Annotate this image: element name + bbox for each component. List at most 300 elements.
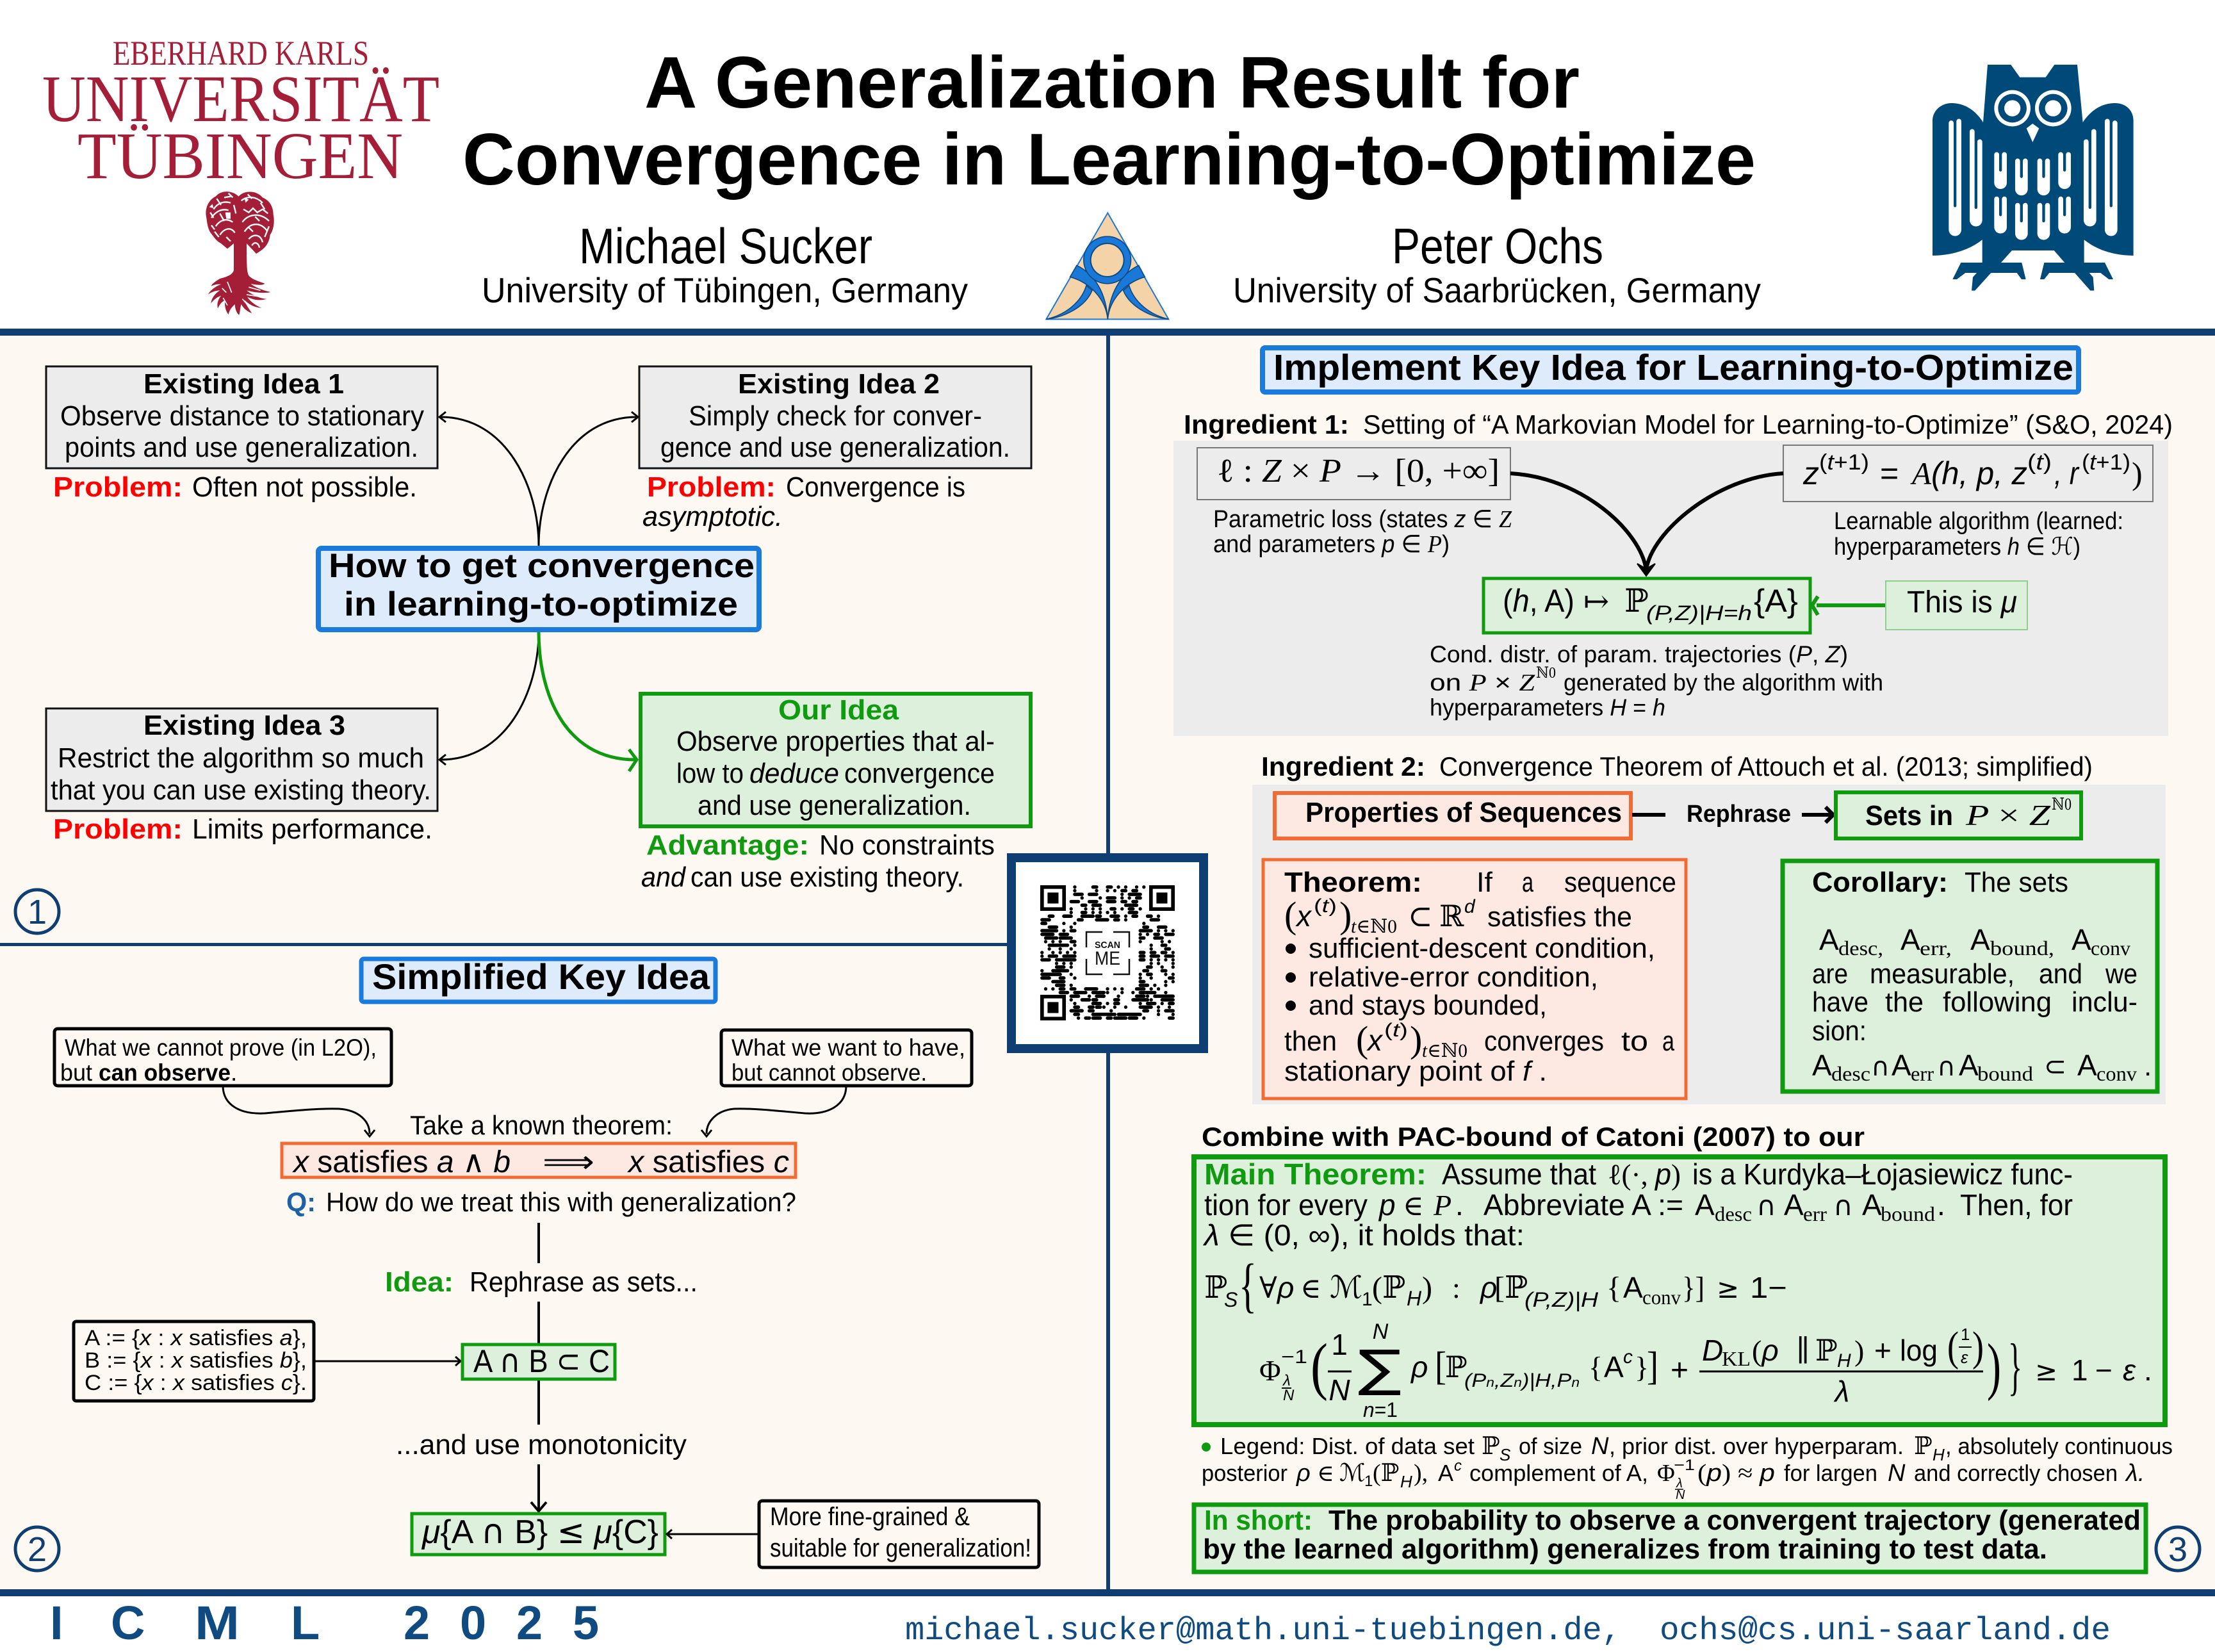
theorem box: ) xyxy=(1339,894,1352,936)
formula: second line: { xyxy=(1589,1351,1603,1384)
theorem box: relative-error condition, xyxy=(1309,961,1598,993)
theorem box: converges xyxy=(1484,1026,1604,1057)
title: A Generalization Result for xyxy=(644,42,1580,124)
conditional distribution box: {A} xyxy=(1754,583,1798,619)
legend: N xyxy=(1888,1460,1906,1487)
arrow: this is mu xyxy=(1812,596,1886,615)
arrowhead xyxy=(1637,564,1655,576)
in short box xyxy=(1194,1505,2146,1572)
conference name: 2 xyxy=(404,1596,430,1649)
card: existing idea 2: gence and use generalization. xyxy=(660,432,1010,463)
formula: second line: ) xyxy=(1987,1330,2001,1402)
sets box xyxy=(1836,792,2081,838)
theorem box: to xyxy=(1621,1026,1648,1057)
theorem statement: ∩ xyxy=(1756,1190,1776,1222)
corollary box: err xyxy=(1911,1062,1934,1085)
card: our idea: Advantage: xyxy=(646,830,809,861)
corollary box: bound xyxy=(1977,1062,2033,1085)
logo wordmark: EBERHARD KARLS xyxy=(113,34,369,72)
algorithm box: (t+1) xyxy=(1819,450,1869,475)
caption: conditional distribution: Cond. distr. of param. trajectories (P, Z) xyxy=(1430,641,1848,667)
ingredient 1 heading: Setting of “A Markovian Model for Learning-to-Optimize” (S&O, 2024) xyxy=(1363,409,2173,439)
algorithm box: A(h, p, z xyxy=(1910,455,2027,491)
theorem box: d xyxy=(1464,896,1476,917)
theorem box: sufficient-descent condition, xyxy=(1309,933,1655,964)
panel: how to get convergence xyxy=(15,366,1031,933)
conference name xyxy=(50,1596,599,1649)
corollary box: bound, xyxy=(1990,936,2054,960)
card: existing idea 1: Often not possible. xyxy=(192,471,417,503)
formula: second line: ( xyxy=(1947,1323,1959,1370)
theorem box: x satisfies a ∧ b xyxy=(292,1145,511,1179)
this is mu box xyxy=(1886,581,2027,630)
theorem box: then xyxy=(1284,1026,1337,1057)
scan me mark: ME xyxy=(1095,948,1120,969)
theorem box: ⟹ xyxy=(543,1145,594,1179)
logo wordmark: TÜBINGEN xyxy=(78,119,403,193)
corollary box: inclu- xyxy=(2072,986,2137,1018)
formula: second line: } xyxy=(2008,1330,2022,1402)
formula: second line: ε xyxy=(1961,1348,1968,1367)
caption: parametric loss: Parametric loss (states z ∈ Z xyxy=(1213,506,1512,533)
loss function box: ℓ : Z × P → [0, +∞] xyxy=(1217,453,1500,489)
badge: section 3 xyxy=(2156,1527,2200,1571)
author: Peter Ochs: Peter Ochs xyxy=(1392,218,1603,274)
conditional distribution box: ℙ xyxy=(1624,583,1649,619)
callout: cannot prove: but xyxy=(60,1059,93,1086)
formula: second line: ( xyxy=(1311,1330,1328,1402)
sets box: Sets in xyxy=(1865,800,1953,831)
theorem box: ( xyxy=(1356,1018,1368,1060)
set definitions box xyxy=(74,1321,314,1401)
legend: (p) ≈ p xyxy=(1697,1460,1775,1487)
theorem box: ⊂ xyxy=(1408,900,1433,933)
card: our idea: Observe properties that al- xyxy=(676,726,995,757)
formula: second line: ] xyxy=(1647,1345,1658,1388)
legend: posterior xyxy=(1202,1460,1287,1486)
formula: second line: D xyxy=(1702,1334,1723,1367)
callout: cannot prove xyxy=(54,1029,391,1086)
formula: first line: ρ xyxy=(1276,1271,1294,1304)
panel: ingredient 2 xyxy=(1252,785,2166,1104)
corollary box: ∩ xyxy=(1871,1052,1890,1082)
callout: more fine-grained: More fine-grained & xyxy=(770,1503,970,1531)
callout: want to have xyxy=(721,1030,972,1086)
icon: tree xyxy=(206,192,274,315)
theorem box: ℝ xyxy=(1439,900,1464,933)
panel: ingredient 1 xyxy=(1173,441,2168,736)
theorem statement: tion for every xyxy=(1204,1188,1368,1222)
heading: Simplified Key Idea xyxy=(372,956,710,997)
formula: second line: + xyxy=(1874,1334,1892,1367)
rephrase arrow xyxy=(1632,801,1833,828)
legend: ℙ xyxy=(1914,1433,1933,1460)
callout: cannot prove: . xyxy=(231,1059,237,1086)
properties box: Properties of Sequences xyxy=(1305,797,1622,828)
icon: triangle logo xyxy=(1046,213,1168,319)
arrow: note to result xyxy=(667,1530,759,1539)
theorem statement: is a Kurdyka–Łojasiewicz func- xyxy=(1692,1157,2073,1191)
legend: N xyxy=(1591,1433,1609,1460)
conference name: 5 xyxy=(573,1596,599,1649)
logo wordmark xyxy=(42,34,439,193)
formula: second line: ρ xyxy=(1410,1350,1428,1384)
card: our idea: can use existing theory. xyxy=(691,862,964,893)
caption: learnable algorithm: Learnable algorithm (learned: xyxy=(1834,508,2123,535)
author: Michael Sucker xyxy=(482,218,968,310)
formula: first line: ∀ xyxy=(1259,1272,1277,1304)
corollary box: following xyxy=(1943,986,2052,1018)
card: existing idea 2: asymptotic. xyxy=(642,501,783,532)
formula: first line: ∈ xyxy=(1300,1273,1321,1304)
caption: conditional distribution: on P × Z xyxy=(1430,669,1535,696)
corollary box: and xyxy=(2039,958,2082,990)
formula: second line: log xyxy=(1900,1334,1938,1367)
legend: λ. xyxy=(2125,1460,2145,1487)
caption: learnable algorithm xyxy=(1834,508,2123,560)
callout: want to have: but cannot observe. xyxy=(732,1059,927,1086)
arrow: to idea 2 xyxy=(539,412,638,546)
theorem statement: P xyxy=(1433,1189,1451,1222)
formula: first line: ρ xyxy=(1479,1271,1497,1304)
text: idea xyxy=(385,1266,698,1298)
main theorem box xyxy=(1194,1157,2165,1425)
result box: μ{A ∩ B} ≤ μ{C} xyxy=(421,1513,658,1551)
conditional distribution box xyxy=(1483,578,1810,633)
formula: second line: } xyxy=(1635,1351,1649,1384)
card: existing idea 3 xyxy=(46,708,437,845)
theorem box: x xyxy=(1295,899,1312,933)
theorem box xyxy=(282,1143,796,1179)
corollary box: . xyxy=(2144,1051,2152,1082)
theorem statement xyxy=(1202,1157,2073,1252)
theorem statement: A xyxy=(1695,1188,1715,1222)
theorem statement: Abbreviate A := xyxy=(1483,1188,1683,1222)
text: idea: Rephrase as sets... xyxy=(470,1266,698,1298)
conference name: C xyxy=(111,1596,145,1649)
panel: implement key idea xyxy=(1173,347,2200,1572)
formula: second line: ℙ xyxy=(1445,1351,1467,1384)
conference name: 0 xyxy=(460,1596,486,1649)
card: our idea: convergence xyxy=(844,758,995,789)
formula: second line: . xyxy=(2144,1353,2152,1387)
theorem box: Theorem: xyxy=(1284,867,1422,898)
theorem box: (t) xyxy=(1384,1020,1408,1041)
formula: second line: ) xyxy=(1854,1334,1864,1367)
conference name: M xyxy=(195,1596,240,1649)
card: existing idea 1: Problem: xyxy=(53,471,183,503)
theorem box: t∈ℕ0 xyxy=(1351,916,1397,937)
card: existing idea 3: Problem: xyxy=(53,814,183,845)
author: Peter Ochs xyxy=(1233,218,1761,310)
author: Michael Sucker: University of Tübingen, Germany xyxy=(482,270,968,310)
formula: second line: 1 xyxy=(2072,1353,2088,1387)
card: our idea: Our Idea xyxy=(778,694,899,726)
formula: second line: ) xyxy=(1972,1323,1984,1370)
formula: second line: N xyxy=(1283,1387,1295,1404)
contact emails: michael.sucker@math.uni-tuebingen.de, xyxy=(905,1613,1621,1649)
legend: Φ xyxy=(1657,1460,1675,1487)
formula: second line: KL xyxy=(1722,1347,1751,1370)
question: How do we treat this with generalization? xyxy=(326,1187,796,1217)
theorem statement: p xyxy=(1378,1188,1396,1222)
legend: N xyxy=(1676,1488,1685,1502)
legend: H xyxy=(1400,1472,1412,1491)
badge: section 3: 3 xyxy=(2168,1530,2187,1569)
caption: conditional distribution: hyperparameters H = h xyxy=(1430,694,1665,721)
badge: section 2: 2 xyxy=(28,1530,47,1569)
formula: first line: ℳ xyxy=(1330,1271,1362,1305)
caption: learnable algorithm: hyperparameters h ∈ ℋ) xyxy=(1834,534,2080,560)
central question box xyxy=(318,547,759,630)
scan me mark: SCAN xyxy=(1095,940,1120,951)
arrow: right callout to theorem xyxy=(701,1086,846,1136)
formula: second line: ℙ xyxy=(1815,1334,1838,1367)
legend: , prior dist. over hyperparam. xyxy=(1609,1433,1904,1459)
formula: second line: N xyxy=(1328,1373,1350,1407)
theorem box: sequence xyxy=(1564,867,1676,898)
question: Q: xyxy=(286,1187,316,1217)
callout: cannot prove: What we cannot prove (in L2O), xyxy=(65,1035,377,1061)
corollary box: A xyxy=(1819,923,1839,956)
formula: second line: (ρ xyxy=(1752,1334,1779,1367)
corollary box: we xyxy=(2105,958,2137,990)
algorithm box: (t) xyxy=(2027,450,2052,475)
theorem statement: Assume that xyxy=(1442,1157,1596,1191)
set definitions box: B := {x : x satisfies b}, xyxy=(85,1348,307,1373)
callout: want to have: What we want to have, xyxy=(732,1035,965,1061)
formula: second line: c xyxy=(1623,1346,1633,1368)
algorithm box: z xyxy=(1802,455,1819,491)
corollary box: The sets xyxy=(1965,867,2068,898)
formula: second line: 1 xyxy=(1961,1325,1970,1344)
legend: S xyxy=(1500,1445,1511,1464)
corollary box: A xyxy=(2072,923,2091,956)
conditional distribution box: (P,Z)|H=h xyxy=(1646,601,1752,625)
legend: Legend: Dist. of data set xyxy=(1220,1433,1475,1459)
contact emails xyxy=(905,1613,2111,1649)
theorem box: x satisfies c xyxy=(627,1145,789,1179)
formula: first line: 1 xyxy=(1362,1289,1373,1310)
algorithm box: , r xyxy=(2054,455,2080,491)
card: existing idea 2 xyxy=(639,366,1031,532)
in short box: In short: xyxy=(1204,1505,1312,1536)
heading: Implement Key Idea for Learning-to-Optimize xyxy=(1273,347,2073,388)
corollary box: A xyxy=(1970,923,1990,956)
formula: first line: ) xyxy=(1422,1271,1432,1305)
theorem box: t∈ℕ0 xyxy=(1422,1040,1467,1061)
callout: cannot prove: can observe xyxy=(99,1059,231,1086)
contact emails: ochs@cs.uni-saarland.de xyxy=(1660,1613,2111,1649)
formula: second line: n=1 xyxy=(1363,1398,1398,1421)
properties box xyxy=(1275,793,1631,838)
legend: H xyxy=(1933,1445,1945,1464)
card: existing idea 2: Existing Idea 2 xyxy=(738,368,940,400)
corollary box: have xyxy=(1812,986,1868,1018)
legend: ρ xyxy=(1296,1460,1311,1487)
algorithm box: ) xyxy=(2132,455,2143,491)
formula: second line: ∑ xyxy=(1358,1340,1402,1398)
badge: section 1: 1 xyxy=(28,893,47,931)
set definitions box: A := {x : x satisfies a}, xyxy=(85,1326,307,1350)
arrow: to our idea xyxy=(539,632,637,771)
corollary box: conv xyxy=(2096,1062,2137,1085)
central question box: in learning-to-optimize xyxy=(344,585,738,623)
corollary box: the xyxy=(1885,986,1924,1018)
inclusion box: A ∩ B ⊂ C xyxy=(473,1343,610,1380)
callout: more fine-grained: suitable for generalization! xyxy=(770,1534,1031,1562)
icon: Saarland owl logo xyxy=(1933,65,2134,291)
title: Convergence in Learning-to-Optimize xyxy=(462,119,1756,200)
corollary box: A xyxy=(1900,923,1920,956)
theorem statement: ∈ xyxy=(1403,1190,1424,1222)
legend: ), xyxy=(1414,1460,1428,1487)
formula: first line: ≥ xyxy=(1717,1273,1739,1304)
formula: first line: (P,Z)|H xyxy=(1524,1288,1599,1311)
formula: first line: [ℙ xyxy=(1494,1271,1528,1305)
theorem box: ) xyxy=(1410,1018,1422,1060)
theorem box: (t) xyxy=(1314,896,1337,917)
this is mu box: This is μ xyxy=(1907,585,2017,619)
formula: first line: { xyxy=(1606,1271,1621,1305)
theorem box: and stays bounded, xyxy=(1309,990,1547,1021)
card: existing idea 1: points and use generalization. xyxy=(65,432,418,463)
formula: second line: − xyxy=(2095,1353,2113,1387)
caption: parametric loss xyxy=(1213,506,1512,558)
formula: second line: + xyxy=(1671,1353,1688,1387)
corollary box: ⊂ xyxy=(2044,1051,2066,1082)
panel: simplified key idea xyxy=(15,956,1039,1571)
formula: second line: N xyxy=(1373,1320,1389,1344)
central question box: How to get convergence xyxy=(329,547,755,585)
corollary box: A xyxy=(2077,1049,2097,1082)
text: take a known theorem: Take a known theorem: xyxy=(410,1110,673,1140)
ingredient 2 heading: Convergence Theorem of Attouch et al. (2013; simplified) xyxy=(1439,751,2093,781)
sets box: P × Z xyxy=(1965,799,2051,831)
algorithm box: (t+1) xyxy=(2082,450,2130,475)
author: Michael Sucker: Michael Sucker xyxy=(579,218,872,274)
sets box: ℕ0 xyxy=(2052,795,2072,814)
formula: second line: A xyxy=(1604,1350,1624,1384)
text: monotonicity: ...and use monotonicity xyxy=(396,1429,687,1460)
conditional distribution box: ↦ xyxy=(1583,585,1609,619)
legend: complement of A, xyxy=(1469,1460,1648,1486)
theorem statement: ∩ xyxy=(1833,1190,1853,1222)
theorem statement: Main Theorem: xyxy=(1204,1157,1426,1191)
formula: first line: A xyxy=(1623,1271,1643,1304)
corollary box: sion: xyxy=(1812,1015,1867,1047)
theorem box: a xyxy=(1522,867,1533,898)
corollary box: desc xyxy=(1831,1062,1870,1085)
arrow: left callout to theorem xyxy=(223,1086,375,1136)
corollary box: A xyxy=(1812,1049,1832,1082)
formula: second line: λ xyxy=(1282,1372,1291,1389)
formula: second line: H xyxy=(1837,1350,1851,1371)
arrows: into conditional distribution xyxy=(1510,473,1783,570)
loss function box xyxy=(1197,448,1510,500)
legend: 1 xyxy=(1364,1473,1373,1490)
corollary box: conv xyxy=(2091,936,2130,960)
caption: conditional distribution: generated by the algorithm with xyxy=(1564,669,1883,696)
formula: first line xyxy=(1204,1252,1787,1319)
card: our idea: and xyxy=(641,862,686,893)
caption: parametric loss: and parameters p ∈ P) xyxy=(1213,531,1450,558)
formula: first line: H xyxy=(1407,1287,1422,1310)
formula: second line: λ xyxy=(1833,1375,1849,1408)
formula: second line: ≥ xyxy=(2035,1355,2057,1387)
corollary box: are xyxy=(1812,958,1848,990)
theorem statement: λ ∈ (0, ∞), it holds that: xyxy=(1202,1218,1524,1252)
logo: University of Tübingen xyxy=(42,34,439,315)
legend: ℙ xyxy=(1482,1433,1500,1460)
card: our idea: deduce xyxy=(749,758,839,789)
conference name: L xyxy=(291,1596,320,1649)
formula: first line: { xyxy=(1239,1252,1257,1319)
theorem box: If xyxy=(1476,867,1493,898)
card: our idea xyxy=(641,694,1031,893)
card: existing idea 1: Existing Idea 1 xyxy=(143,368,344,400)
caption: conditional distribution: ℕ0 xyxy=(1536,665,1556,682)
formula: second line: (Pn,Zn)|H,P n xyxy=(1464,1370,1580,1391)
scan me mark xyxy=(1086,932,1129,974)
arrow: to idea 1 xyxy=(439,412,539,546)
badge: section 2 xyxy=(15,1527,59,1571)
theorem statement: Then, for xyxy=(1960,1188,2073,1222)
theorem statement: . xyxy=(1455,1188,1464,1222)
formula: second line: [ xyxy=(1435,1345,1446,1388)
formula: first line: }] xyxy=(1682,1271,1704,1305)
card: existing idea 1 xyxy=(46,366,437,503)
formula: first line: S xyxy=(1224,1288,1238,1311)
author: Peter Ochs: University of Saarbrücken, Germany xyxy=(1233,270,1761,310)
QR code panel xyxy=(1011,858,1204,1049)
legend: c xyxy=(1454,1457,1462,1475)
corollary box: A xyxy=(1892,1049,1911,1082)
conference name: 2 xyxy=(516,1596,543,1649)
corollary box: A xyxy=(1959,1049,1979,1082)
corollary box: err, xyxy=(1920,936,1952,960)
legend: λ xyxy=(1676,1476,1683,1491)
legend: ∈ xyxy=(1317,1460,1334,1486)
card: our idea: No constraints xyxy=(819,830,995,861)
in short box: by the learned algorithm) generalizes from training to test data. xyxy=(1203,1533,2047,1565)
legend: −1 xyxy=(1674,1457,1695,1474)
theorem box: stationary point of f . xyxy=(1284,1056,1547,1087)
conference name: I xyxy=(50,1596,63,1649)
formula: second line xyxy=(1259,1320,2152,1421)
caption: conditional distribution xyxy=(1430,641,1883,721)
theorem box: satisfies the xyxy=(1487,901,1632,933)
arrow: sets to inclusion xyxy=(314,1357,461,1366)
corollary box: ∩ xyxy=(1937,1052,1956,1082)
formula: second line: ε xyxy=(2123,1353,2136,1387)
conditional distribution box: (h, A) xyxy=(1503,583,1574,619)
combine heading: Combine with PAC-bound of Catoni (2007) to our xyxy=(1202,1122,1865,1152)
card: existing idea 2: Problem: xyxy=(647,471,776,503)
corollary box: Corollary: xyxy=(1812,867,1948,898)
in short box: The probability to observe a convergent trajectory (generated xyxy=(1328,1505,2141,1536)
legend: ℳ xyxy=(1339,1460,1366,1487)
formula: first line: 1− xyxy=(1750,1271,1787,1304)
connector xyxy=(531,1223,546,1511)
text: idea: Idea: xyxy=(385,1266,454,1298)
QR finder patterns xyxy=(1042,887,1173,1018)
theorem box: a xyxy=(1662,1026,1674,1057)
theorem statement: desc xyxy=(1715,1202,1752,1225)
card: our idea: and use generalization. xyxy=(698,790,971,821)
corollary box: desc, xyxy=(1838,936,1883,960)
arrow: to idea 3 xyxy=(439,632,539,765)
